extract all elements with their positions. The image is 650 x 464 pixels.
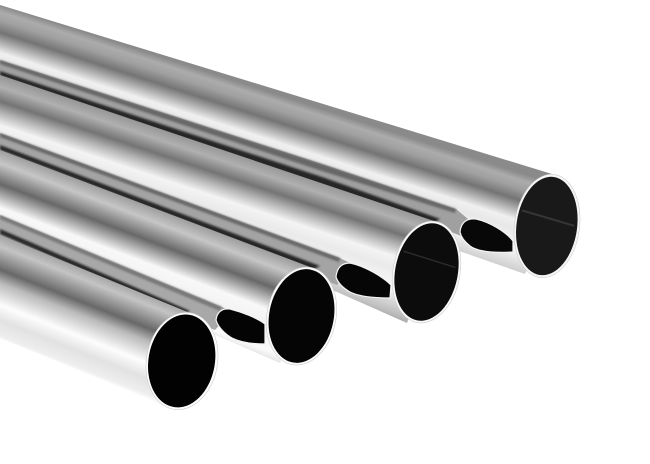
lens reflection — [336, 263, 391, 298]
lens reflection — [460, 219, 513, 252]
tube body — [0, 5, 552, 274]
tube opening — [384, 215, 469, 329]
tube opening — [258, 261, 345, 371]
tube body — [0, 150, 310, 363]
tube opening — [508, 170, 586, 282]
front tube — [0, 235, 225, 415]
tube opening — [139, 307, 225, 415]
second tube — [0, 75, 469, 329]
back tube — [0, 5, 586, 282]
groove strip — [0, 215, 232, 330]
tube body — [0, 75, 437, 323]
groove strip — [0, 133, 352, 285]
third tube — [0, 150, 345, 371]
lens reflection — [216, 309, 265, 344]
tube body — [0, 235, 190, 407]
groove strip — [0, 60, 468, 236]
